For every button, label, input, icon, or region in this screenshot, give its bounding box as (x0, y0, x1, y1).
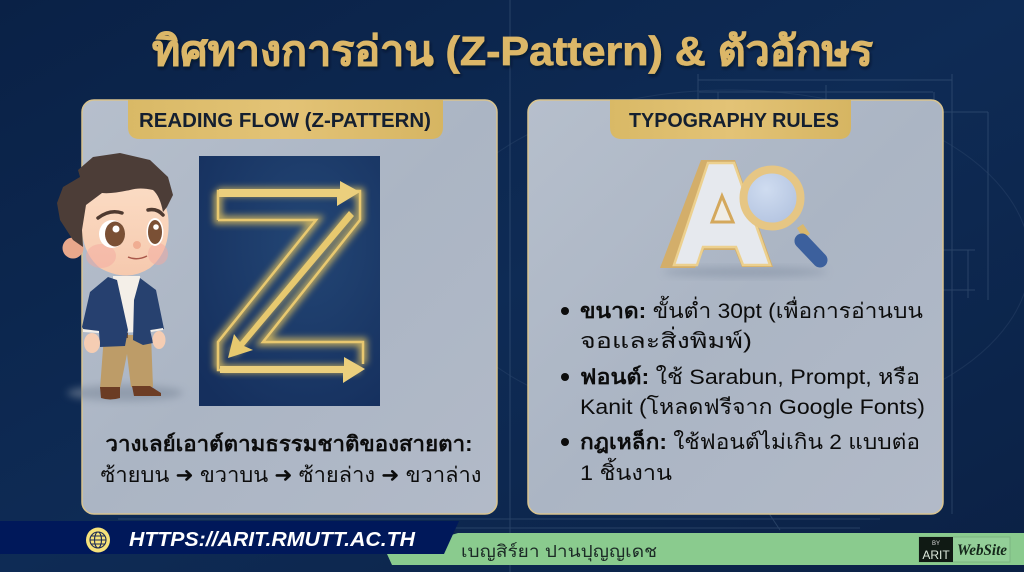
bullet: iron rule: กฎเหล็ก: ใช้ฟอนต์ไม่เกิน 2 แบบต่อ (580, 428, 920, 454)
caption: ซ้ายบน ➜ ขวาบน ➜ ซ้ายล่าง ➜ ขวาล่าง (100, 464, 482, 487)
heading: typography rules: TYPOGRAPHY RULES (629, 110, 839, 132)
bullet: iron rule (561, 428, 920, 485)
caption: วางเลย์เอาต์ตามธรรมชาติของสายตา: (106, 432, 472, 456)
icon: letter A with magnifier (660, 160, 827, 277)
bullet: size: ขนาด: ขั้นต่ำ 30pt (เพื่อการอ่านบน (580, 296, 923, 323)
heading: typography rules (610, 100, 851, 139)
z-pattern diagram (199, 156, 380, 406)
bullet: size: จอและสิ่งพิมพ์) (580, 326, 752, 353)
footer: green author bar: เบญสิร์ยา ปานปุญญเดช (461, 542, 657, 562)
bullet: size (561, 296, 923, 353)
arrow: diagonal (228, 211, 354, 358)
title: ทิศทางการอ่าน (Z-Pattern) & ตัวอักษร (152, 28, 873, 74)
logo: ARIT (922, 548, 950, 562)
bullet: font (561, 365, 925, 419)
bullet: iron rule: 1 ชิ้นงาน (580, 458, 672, 485)
heading: reading flow (128, 100, 443, 139)
logo: BY (932, 541, 940, 547)
footer: navy url bar (0, 521, 459, 554)
bullet: font: Kanit (โหลดฟรีจาก Google Fonts) (580, 395, 925, 419)
heading: reading flow: READING FLOW (Z-PATTERN) (139, 110, 431, 132)
bullet list (561, 296, 925, 485)
footer: green author bar (387, 533, 1024, 565)
bullet: font: ฟอนต์: ใช้ Sarabun, Prompt, หรือ (580, 365, 920, 389)
logo: WebSite (957, 542, 1007, 559)
arrow: bottom (220, 357, 365, 383)
panel: typography rules (528, 100, 943, 514)
arrow: top (219, 181, 360, 206)
logo (919, 537, 1010, 562)
caption (100, 432, 482, 487)
icon: globe (86, 528, 110, 552)
character illustration (57, 153, 183, 401)
footer: navy url bar: HTTPS://ARIT.RMUTT.AC.TH (129, 529, 416, 551)
panel: reading flow (57, 100, 497, 514)
